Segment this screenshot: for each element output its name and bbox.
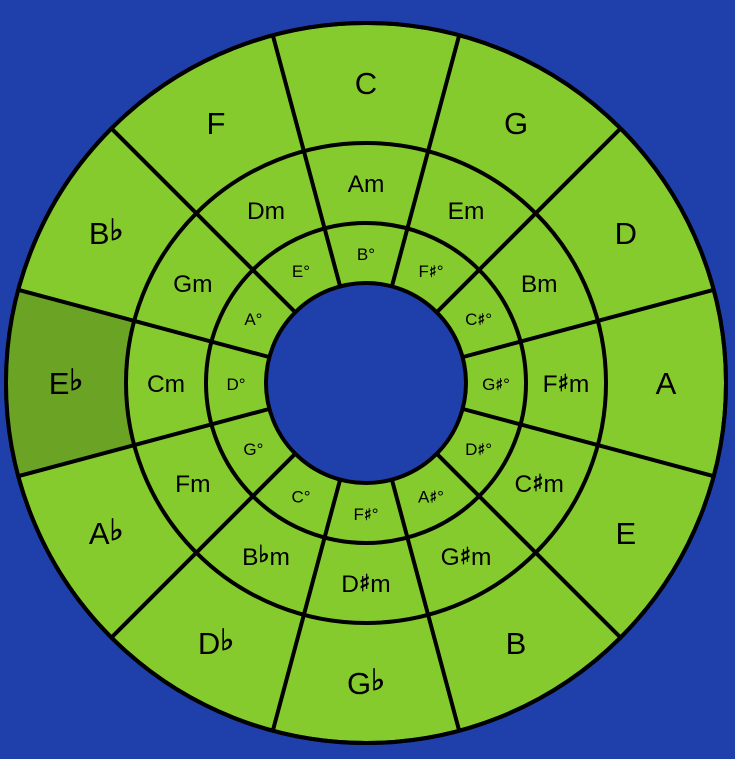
key E flat: E (49, 366, 69, 401)
key G: G (504, 106, 528, 141)
chord A diminished: A° (244, 310, 262, 329)
chord G sharp minor: m (471, 544, 491, 571)
key A: A (656, 366, 677, 401)
key A flat: ♭ (110, 513, 123, 547)
chord Em: Em (448, 198, 484, 225)
chord C sharp diminished: C♯° (465, 310, 492, 329)
chord Cm: Cm (147, 371, 185, 398)
chord G diminished: G° (243, 440, 263, 459)
chord B flat minor: m (269, 544, 290, 571)
chord Fm: Fm (175, 471, 210, 498)
key D: D (615, 216, 637, 251)
center hole (266, 283, 466, 483)
key D flat: ♭ (220, 623, 234, 657)
key B flat: B (89, 216, 110, 251)
key C: C (355, 66, 377, 101)
chord F sharp diminished, bottom: F♯° (353, 505, 379, 524)
major keys ring (49, 66, 677, 701)
chord E diminished: E° (292, 262, 310, 281)
chord D sharp minor: m (370, 571, 391, 598)
chord C sharp minor: ♯ (532, 470, 543, 497)
chord D sharp minor: ♯ (359, 570, 370, 597)
chord B flat minor: ♭ (258, 541, 269, 568)
chord Bm: Bm (521, 271, 558, 298)
key G flat: G (347, 666, 371, 701)
chord B flat minor: B (242, 544, 258, 571)
chord G sharp diminished: G♯° (482, 375, 510, 394)
chord C sharp minor: C (515, 471, 532, 498)
minor chords ring (147, 171, 589, 598)
chord F sharp minor: m (569, 371, 589, 398)
chord B diminished: B° (357, 245, 375, 264)
chord C diminished: C° (291, 488, 311, 507)
chord F sharp minor: ♯ (558, 370, 569, 397)
key E flat: ♭ (69, 363, 83, 397)
chord Am: Am (348, 171, 384, 198)
key F: F (207, 106, 225, 141)
chord G sharp minor: G (441, 544, 460, 571)
key E: E (615, 516, 636, 551)
highlighted sector: E flat (6, 290, 134, 476)
chord D diminished: D° (226, 375, 246, 394)
key B flat: ♭ (110, 213, 123, 247)
chord Gm: Gm (173, 271, 213, 298)
chord Dm: Dm (247, 198, 285, 225)
key G flat: ♭ (371, 663, 385, 697)
chord C sharp minor: m (543, 471, 564, 498)
diminished chords ring (226, 245, 510, 524)
chord D sharp diminished: D♯° (465, 440, 492, 459)
key D flat: D (198, 626, 220, 661)
key B: B (506, 626, 526, 661)
key A flat: A (89, 516, 110, 551)
chord D sharp minor: D (341, 571, 359, 598)
chord F sharp minor: F (543, 371, 558, 398)
chord F sharp diminished: F♯° (418, 262, 444, 281)
chord G sharp minor: ♯ (460, 543, 471, 570)
chord A sharp diminished: A♯° (418, 488, 444, 507)
